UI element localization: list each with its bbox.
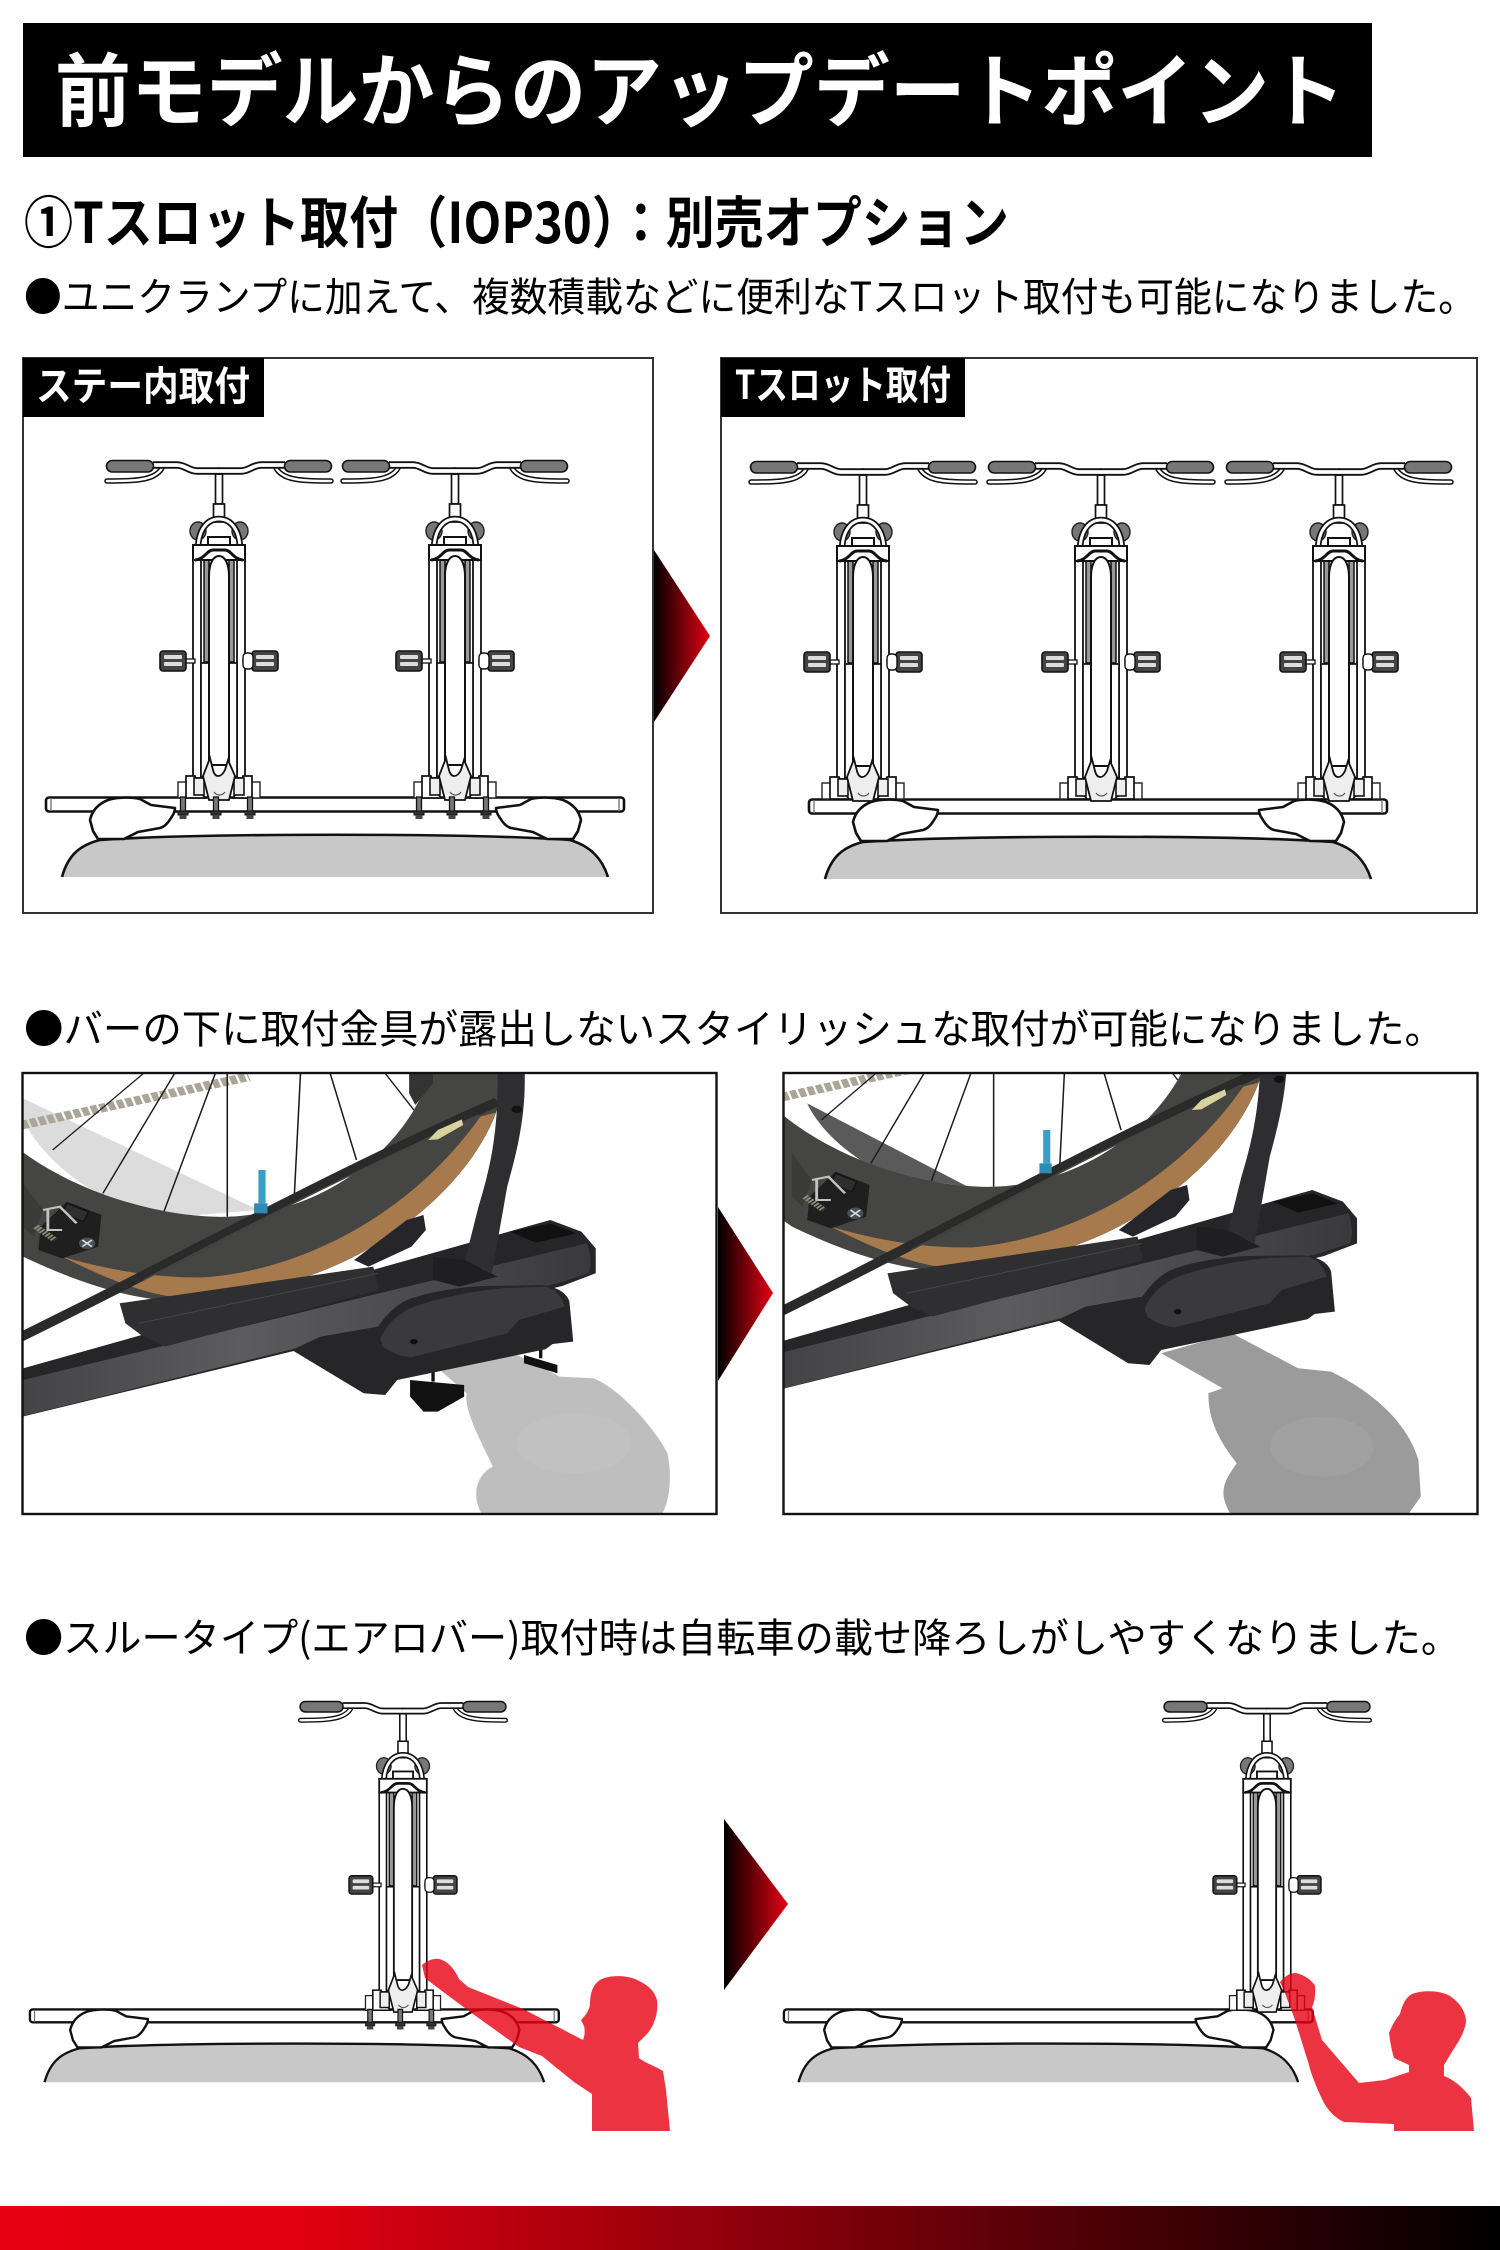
bicycle one bbox=[750, 462, 976, 801]
photo panel: updated mount bbox=[782, 1072, 1479, 1516]
panel: mounting inside stay bbox=[23, 354, 653, 913]
arrow three bbox=[724, 1819, 788, 1990]
person reaching bbox=[1280, 1973, 1474, 2131]
bicycle one bbox=[106, 460, 332, 819]
bicycle two bbox=[988, 462, 1214, 801]
tab label: inside stay: ステー内取付 bbox=[36, 354, 250, 412]
bicycle bbox=[300, 1701, 506, 2029]
roof, bar and feet bbox=[809, 800, 1387, 879]
tab label: T-slot: Tスロット取付 bbox=[735, 353, 951, 411]
arrow two bbox=[718, 1207, 773, 1381]
diagram: loading after update bbox=[784, 1701, 1474, 2131]
roof, bar and feet bbox=[46, 798, 624, 877]
text: third note: ●スルータイプ(エアロバー)取付時は自転車の載せ降ろしがしやすくなりました。 bbox=[24, 1606, 1460, 1664]
bicycle two bbox=[342, 460, 568, 819]
person reaching bbox=[422, 1959, 670, 2131]
roof, bar and feet bbox=[30, 2009, 559, 2082]
title banner: 前モデルからのアップデートポイント bbox=[55, 28, 1345, 144]
arrow one bbox=[654, 550, 710, 722]
section heading: ①Tスロット取付（IOP30）：別売オプション bbox=[24, 179, 1009, 260]
diagram: loading before update bbox=[30, 1701, 670, 2131]
bicycle bbox=[1164, 1701, 1370, 2012]
bicycle three bbox=[1226, 462, 1452, 801]
panel: T-slot mounting bbox=[721, 353, 1477, 913]
text: second note: ●バーの下に取付金具が露出しないスタイリッシュな取付が可能になりました。 bbox=[24, 997, 1444, 1055]
footer gradient bar bbox=[0, 2206, 1500, 2250]
roof, bar and feet bbox=[784, 2009, 1313, 2082]
photo panel: previous mount bbox=[21, 1072, 718, 1516]
